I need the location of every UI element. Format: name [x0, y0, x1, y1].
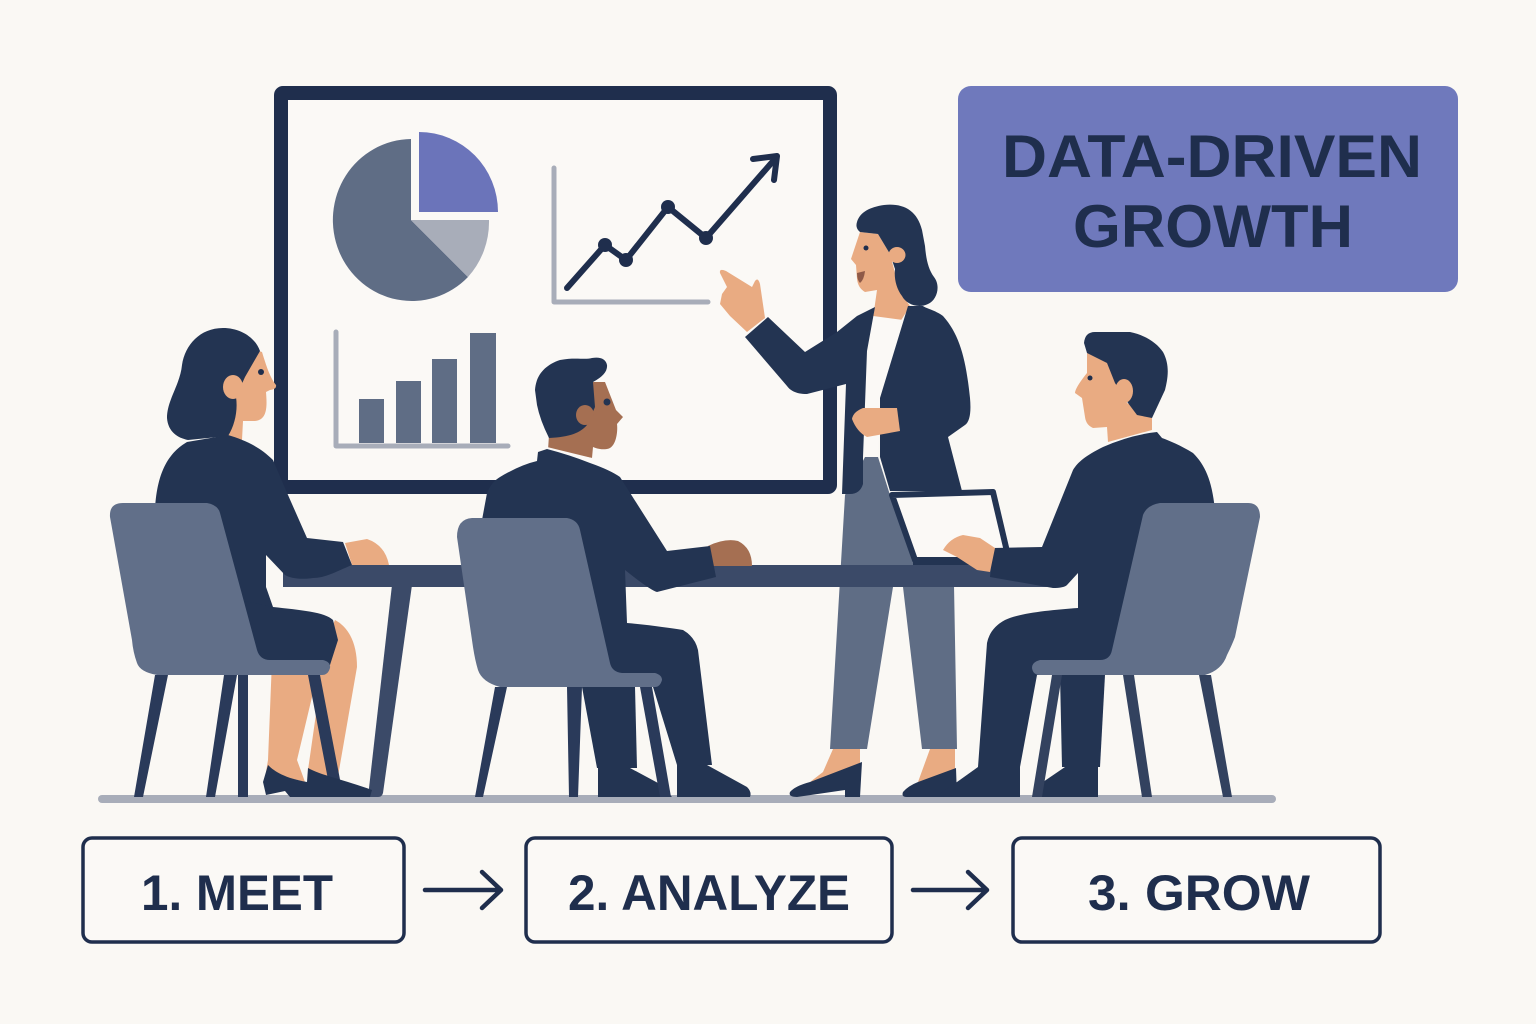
laptop: [892, 492, 1009, 565]
step 1: meet: 1. MEET: [141, 865, 333, 921]
step 1: meet: [83, 838, 404, 942]
left person head: [167, 328, 276, 440]
center person shoes: [598, 765, 751, 797]
floor line: [98, 795, 1276, 803]
right person head: [1075, 332, 1168, 442]
presenter: [720, 205, 970, 797]
left person shoes: [263, 765, 372, 797]
right person: [941, 332, 1215, 797]
center person: [482, 358, 751, 797]
presenter feet and shoes: [790, 749, 957, 797]
center chair legs: [475, 687, 671, 797]
left person hand: [345, 539, 389, 565]
right person suit: [978, 432, 1215, 767]
right chair legs: [1032, 675, 1232, 797]
presenter trousers: [830, 457, 957, 749]
left chair seat: [110, 503, 330, 675]
presenter jacket and arm: [745, 306, 970, 494]
bar chart: [336, 332, 508, 446]
arrow: step 1 to step 2: [425, 872, 501, 908]
left person: [155, 328, 389, 782]
right person shoes: [941, 767, 1098, 797]
table: [283, 565, 1053, 797]
presenter resting hand: [852, 408, 900, 437]
pie chart: [333, 132, 498, 301]
center person jacket and thigh: [482, 449, 716, 765]
title badge: GROWTH: [1073, 193, 1353, 260]
presenter shirt: [863, 316, 903, 457]
center person near leg: [582, 687, 637, 768]
left person jacket: [155, 435, 352, 640]
right chair seat: [1032, 503, 1260, 675]
left person skirt: [240, 600, 338, 665]
step 2: analyze: [526, 838, 892, 942]
whiteboard: [281, 93, 830, 487]
step 2: analyze: 2. ANALYZE: [568, 865, 850, 921]
center person head: [535, 358, 623, 458]
center chair seat: [457, 518, 662, 687]
right person hand: [943, 535, 995, 572]
left person legs: [266, 620, 357, 782]
right person far leg: [1060, 675, 1105, 767]
step 3: grow: 3. GROW: [1088, 865, 1311, 921]
title badge: DATA-DRIVEN: [1002, 123, 1422, 190]
title badge: [958, 86, 1458, 292]
center person hand: [708, 540, 752, 566]
step 3: grow: [1013, 838, 1380, 942]
arrow: step 2 to step 3: [913, 872, 987, 908]
left chair legs: [134, 675, 342, 797]
line chart: [554, 156, 777, 302]
right person collar: [1108, 430, 1160, 448]
presenter pointing hand: [720, 270, 765, 332]
center person collar: [547, 447, 592, 463]
presenter head: [851, 205, 938, 322]
